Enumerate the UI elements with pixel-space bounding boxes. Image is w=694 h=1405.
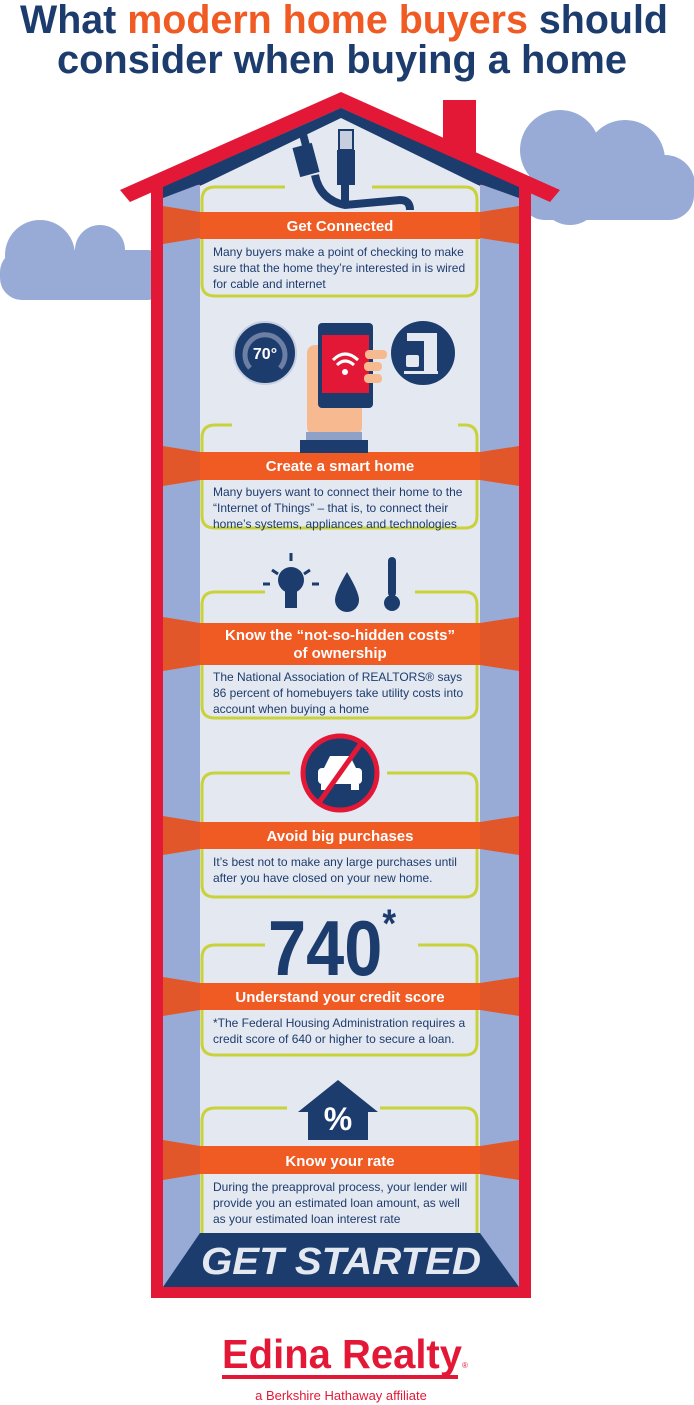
heading + text: credit score (213, 989, 465, 1046)
heading + text: get connected: Get Connected (287, 218, 393, 235)
heading + text: smart home: Many buyers want to connect their home to the (213, 485, 463, 499)
logo: ® (462, 1361, 468, 1370)
icon: coffee maker (391, 321, 455, 385)
icon: house percent (298, 1080, 378, 1140)
logo: a Berkshire Hathaway affiliate (255, 1388, 427, 1403)
big number 740: 740 (268, 904, 398, 992)
heading + text: credit score: credit score of 640 or higher to secure a loan. (213, 1032, 454, 1046)
title: consider when buying a home (57, 38, 627, 82)
big number 740: * (382, 902, 396, 946)
icon: no car (303, 736, 377, 810)
heading + text: avoid purchases: It’s best not to make any large purchases until (213, 855, 457, 869)
heading + text: rate: Know your rate (285, 1153, 395, 1170)
house body (151, 180, 531, 1298)
icon: cables (292, 129, 410, 210)
logo: Edina Realty (222, 1331, 462, 1377)
heading + text: costs (213, 627, 463, 716)
orange bands (163, 206, 519, 1180)
heading + text: smart home: home’s systems, appliances and technologies (213, 517, 457, 531)
heading + text: smart home (213, 458, 463, 531)
title (20, 0, 668, 82)
icon: hand phone (300, 323, 387, 453)
heading + text: smart home: “Internet of Things” – that is, to connect their (213, 501, 448, 515)
heading + text: rate: During the preapproval process, your lender will (213, 1180, 467, 1194)
heading + text: get connected: Many buyers make a point of checking to make (213, 245, 464, 259)
icon: house percent: % (324, 1101, 352, 1137)
icon: thermostat (234, 322, 296, 384)
heading + text: get connected: for cable and internet (213, 277, 326, 291)
heading + text: credit score: Understand your credit score (235, 989, 445, 1006)
heading + text: costs: of ownership (293, 645, 387, 662)
roof (120, 92, 560, 202)
yellow boxes (202, 187, 477, 1233)
cloud left (0, 220, 170, 300)
heading + text: get connected (213, 218, 465, 291)
heading + text: avoid purchases (213, 828, 457, 885)
get started button: GET STARTED (201, 1241, 481, 1283)
heading + text: costs: 86 percent of homebuyers take utility costs into (213, 686, 463, 700)
heading + text: rate: as your estimated loan interest rate (213, 1212, 401, 1226)
heading + text: costs: account when buying a home (213, 702, 369, 716)
icon: bulb drop thermometer (263, 553, 400, 612)
heading + text: smart home: Create a smart home (266, 458, 414, 475)
heading + text: avoid purchases: after you have closed on your new home. (213, 871, 432, 885)
logo (222, 1331, 468, 1403)
heading + text: costs: The National Association of REALTORS® says (213, 670, 462, 684)
icon: thermostat: 70° (253, 346, 277, 363)
cloud right (520, 110, 694, 225)
heading + text: get connected: sure that the home they’re interested in is wired (213, 261, 465, 275)
get started button (163, 1233, 519, 1287)
chimney (443, 100, 476, 170)
heading + text: rate (213, 1153, 467, 1226)
heading + text: costs: Know the “not-so-hidden costs” (225, 627, 455, 644)
heading + text: avoid purchases: Avoid big purchases (267, 828, 413, 845)
heading + text: rate: provide you an estimated loan amount, as well (213, 1196, 460, 1210)
heading + text: credit score: *The Federal Housing Administration requires a (213, 1016, 465, 1030)
